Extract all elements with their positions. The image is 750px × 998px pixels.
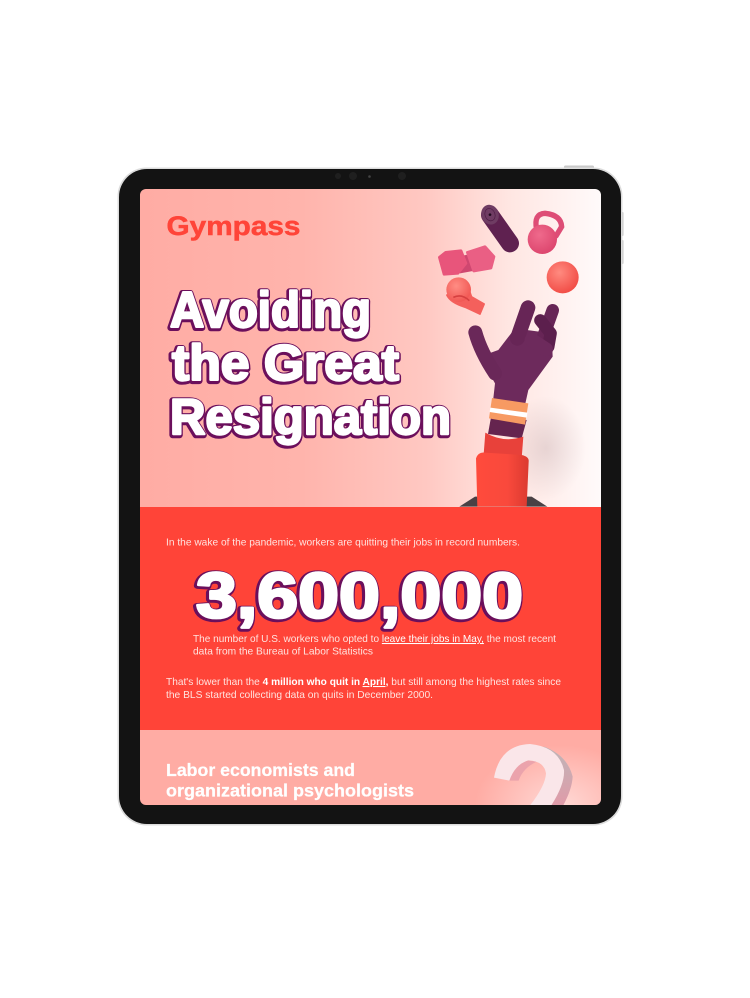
- stat description: [193, 634, 556, 654]
- context paragraph: That's lower than the 4 million who quit in April, but still among the highest rates since: [166, 676, 561, 688]
- wristband: [489, 398, 528, 425]
- cast shadow: [522, 412, 574, 484]
- icon: dumbbell: [439, 247, 494, 274]
- title: Resignation: [170, 389, 451, 445]
- infographic shown on a tablet mockup: [118, 166, 624, 826]
- stat description: data from the Bureau of Labor Statistics: [193, 646, 373, 658]
- title: the Great: [171, 336, 399, 392]
- icon: yoga mat: [478, 202, 510, 243]
- big number: 3,600,000: [196, 560, 523, 632]
- title: the Great: [172, 335, 399, 391]
- hand: [475, 308, 553, 405]
- sleeve: [459, 433, 547, 507]
- intro text: In the wake of the pandemic, workers are quitting their jobs in record numbers.: [166, 536, 520, 548]
- title: Resignation: [169, 390, 450, 446]
- title: Avoiding: [170, 282, 371, 338]
- screen content: [140, 189, 601, 805]
- context paragraph: the BLS started collecting data on quits in December 2000.: [166, 689, 433, 701]
- stat description: The number of U.S. workers who opted to leave their jobs in May, the most recent: [193, 633, 556, 645]
- section heading: [166, 760, 414, 800]
- title: [169, 282, 451, 446]
- icon: 3D question mark: [494, 744, 573, 808]
- title: Avoiding: [169, 283, 370, 339]
- illustration: hand juggling fitness equipment: [439, 202, 586, 507]
- logo: Gympass: Gympass: [166, 211, 300, 241]
- section heading: organizational psychologists: [166, 780, 414, 800]
- section heading: Labor economists and: [166, 760, 355, 780]
- panel: red statistics section: [140, 507, 601, 730]
- panel: hero background: [140, 189, 601, 507]
- big number: 3,600,000: [195, 560, 522, 632]
- icon: kettlebell: [528, 213, 562, 254]
- tablet device frame: [118, 166, 624, 826]
- panel: lower section: [140, 730, 601, 805]
- context paragraph: [166, 678, 561, 700]
- icon: boxing glove: [446, 277, 484, 314]
- wrist: [488, 418, 527, 438]
- icon: medicine ball: [547, 261, 579, 293]
- fitness equipment: [439, 202, 579, 314]
